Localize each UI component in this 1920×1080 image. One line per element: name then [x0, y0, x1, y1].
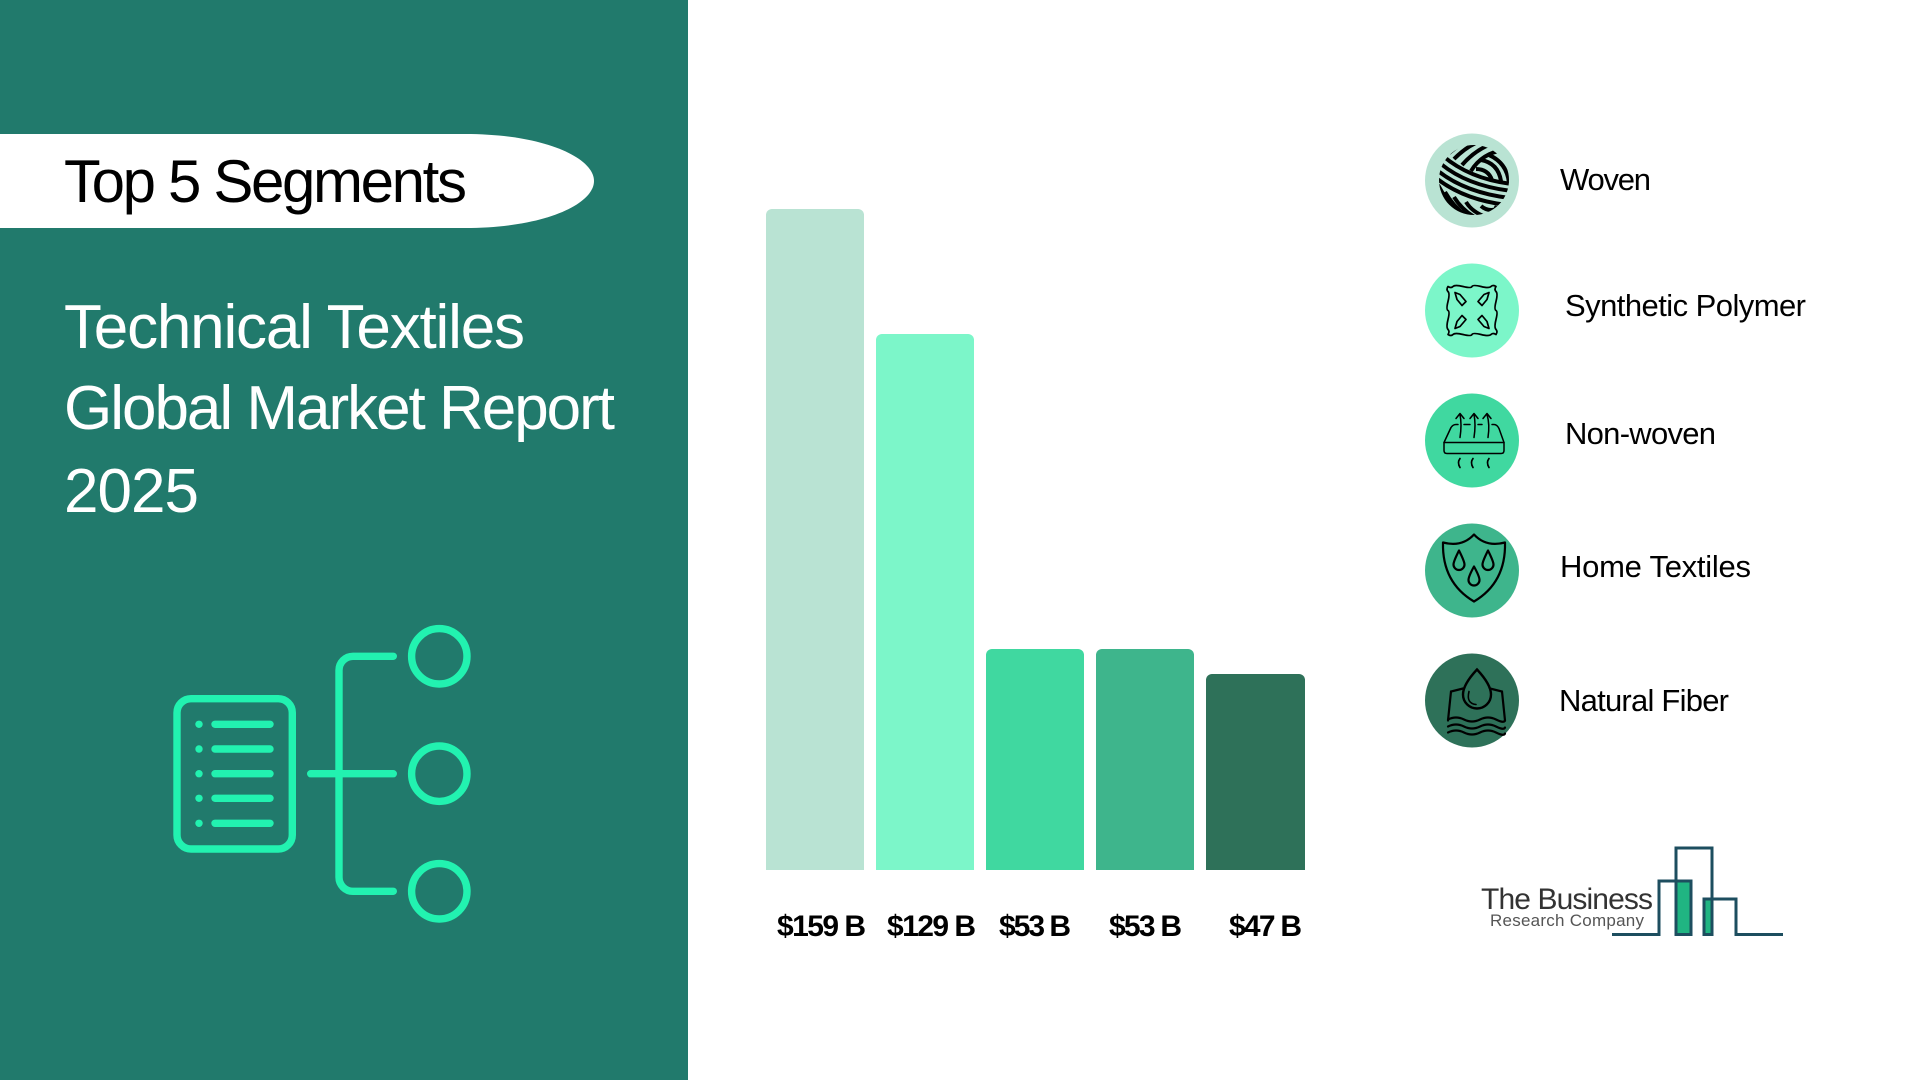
- bar: Synthetic Polymer $129 B: [876, 334, 974, 870]
- panel: left title panel: [0, 0, 688, 1080]
- legend item: Synthetic Polymer: Synthetic Polymer: [1565, 288, 1806, 323]
- title: Technical Textiles: [64, 293, 525, 362]
- legend: segments: [1425, 134, 1806, 748]
- badge: top 5 segments pill: Top 5 Segments: [64, 148, 467, 215]
- logo: The Business Research Company: [1481, 848, 1783, 934]
- badge: top 5 segments pill: [0, 134, 594, 228]
- bar chart: [766, 209, 1305, 943]
- bar: Home Textiles $53 B: [1096, 649, 1194, 870]
- legend item: Non-woven: [1425, 394, 1716, 488]
- logo: The Business Research Company: The Business: [1481, 883, 1653, 916]
- bar value labels: $53 B: [1109, 910, 1182, 943]
- title: Global Market Report: [64, 374, 615, 443]
- legend item: Natural Fiber: [1425, 654, 1729, 748]
- bar: Non-woven $53 B: [986, 649, 1084, 870]
- legend item: Home Textiles: [1425, 524, 1751, 618]
- title: 2025: [64, 457, 199, 526]
- bar: Natural Fiber $47 B: [1206, 674, 1305, 870]
- legend item: Woven: [1425, 134, 1651, 228]
- legend item: Woven: Woven: [1560, 162, 1651, 197]
- legend item: Synthetic Polymer: [1425, 264, 1806, 358]
- bar value labels: $159 B: [777, 910, 866, 943]
- bar value labels: [777, 910, 1302, 943]
- bar value labels: $129 B: [887, 910, 976, 943]
- logo: The Business Research Company: Research Company: [1490, 911, 1644, 930]
- legend item: Non-woven: Non-woven: [1565, 416, 1716, 451]
- legend item: Natural Fiber: Natural Fiber: [1559, 683, 1729, 718]
- icon: document with branching list: [177, 629, 467, 919]
- bar value labels: $47 B: [1229, 910, 1302, 943]
- bar: Woven $159 B: [766, 209, 864, 870]
- title: [64, 293, 615, 526]
- bar value labels: $53 B: [999, 910, 1071, 943]
- legend item: Home Textiles: Home Textiles: [1560, 549, 1751, 584]
